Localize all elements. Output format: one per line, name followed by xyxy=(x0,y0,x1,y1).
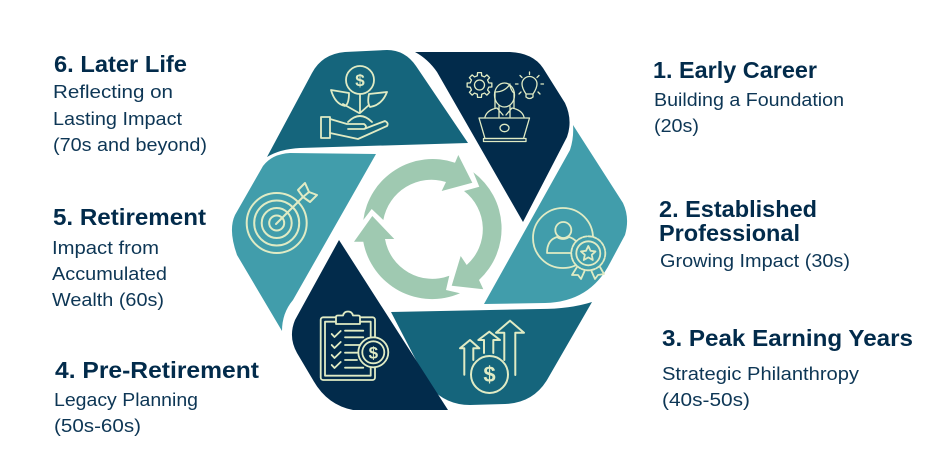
segment 6: later life xyxy=(267,50,468,157)
icon: person with award badge xyxy=(533,208,605,279)
segment 2: established professional xyxy=(484,125,627,304)
label: 4. pre-retirement xyxy=(54,357,259,436)
icon: plant growing coin in hand: $ xyxy=(355,71,365,90)
label: 3. peak earning years xyxy=(662,325,913,410)
cycle diagram xyxy=(232,50,627,410)
label: 2. established professional: Growing Impact (30s) xyxy=(660,251,850,271)
label: 5. retirement: Wealth (60s) xyxy=(52,290,164,310)
icon: clipboard checklist with coin: $ xyxy=(369,344,379,362)
label: 5. retirement xyxy=(52,204,206,310)
label: 5. retirement: Impact from xyxy=(52,238,159,258)
icon: coin with rising arrows xyxy=(460,321,524,393)
icon: clipboard checklist with coin xyxy=(321,312,388,380)
label: 2. established professional: 2. Established xyxy=(659,196,817,222)
label: 4. pre-retirement: Legacy Planning xyxy=(54,390,198,410)
arrow: bottom left xyxy=(354,216,460,299)
segment 1: early career xyxy=(415,52,570,222)
label: 1. early career xyxy=(653,57,844,136)
label: 1. early career: 1. Early Career xyxy=(653,57,817,83)
label: 3. peak earning years: (40s-50s) xyxy=(662,390,750,410)
label: 6. later life: 6. Later Life xyxy=(54,51,187,77)
label: 3. peak earning years: Strategic Philanthropy xyxy=(662,364,859,384)
label: 6. later life: Reflecting on xyxy=(53,82,173,102)
arrow: right xyxy=(452,172,502,289)
segment 3: peak earning years xyxy=(391,302,592,405)
label: 5. retirement: Accumulated xyxy=(52,264,167,284)
label: 6. later life: Lasting Impact xyxy=(53,109,182,129)
label: 2. established professional xyxy=(659,196,850,271)
icon: plant growing coin in hand xyxy=(321,66,388,139)
icon: professional at laptop xyxy=(467,72,544,142)
label: 1. early career: Building a Foundation xyxy=(654,90,844,110)
label: 5. retirement: 5. Retirement xyxy=(53,204,206,230)
icon: coin with rising arrows: $ xyxy=(483,362,496,387)
icon: target with arrow xyxy=(247,183,317,253)
label: 3. peak earning years: 3. Peak Earning Years xyxy=(662,325,913,351)
segment 5: retirement xyxy=(232,153,376,331)
label: 6. later life: (70s and beyond) xyxy=(53,135,207,155)
circular arrows xyxy=(354,155,502,299)
label: 2. established professional: Professional xyxy=(659,220,800,246)
label: 4. pre-retirement: (50s-60s) xyxy=(54,416,141,436)
label: 4. pre-retirement: 4. Pre-Retirement xyxy=(55,357,259,383)
arrow: top xyxy=(363,155,472,220)
label: 6. later life xyxy=(53,51,207,155)
segment 4: pre-retirement xyxy=(292,240,448,410)
label: 1. early career: (20s) xyxy=(654,116,699,136)
